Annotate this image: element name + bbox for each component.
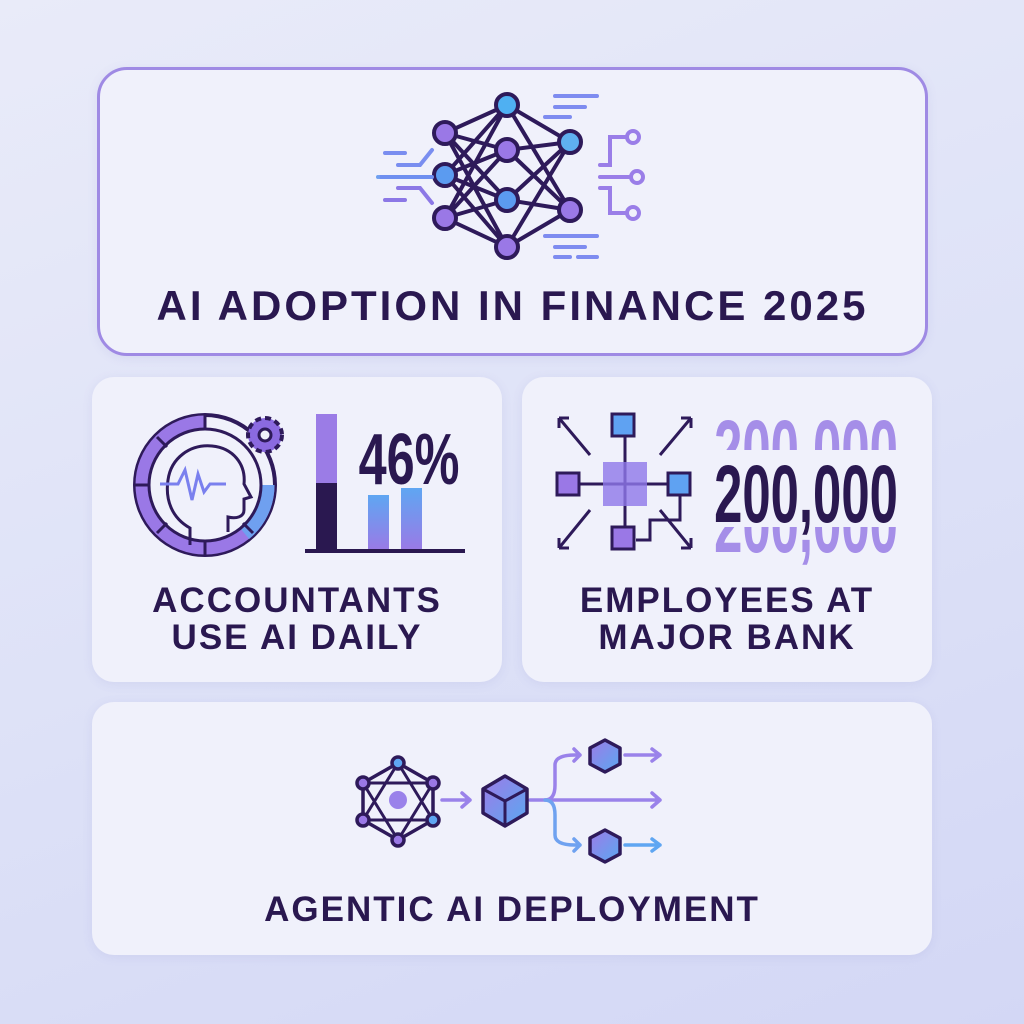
panel: employees (522, 377, 932, 682)
panel: agentic (92, 702, 932, 955)
stat: 46%: 46% (359, 420, 459, 500)
text: employees (580, 581, 874, 657)
text: employees: EMPLOYEES AT (580, 581, 874, 620)
icon: head ring with gear (135, 415, 282, 555)
stat: 200,000: 200,000 (714, 404, 898, 495)
panel: header (97, 67, 928, 356)
stat: 200,000: 200,000 (714, 449, 898, 540)
title: AI ADOPTION IN FINANCE 2025 (157, 282, 868, 329)
text: accountants (152, 581, 442, 657)
stat: 200,000 (716, 420, 896, 565)
text: accountants: ACCOUNTANTS (152, 581, 442, 620)
icon: agentic flow (357, 740, 660, 862)
panel: accountants (92, 377, 502, 682)
text: accountants: USE AI DAILY (172, 618, 422, 657)
icon: network diagram (557, 414, 691, 549)
icon: neural network (376, 94, 643, 258)
text: agentic: AGENTIC AI DEPLOYMENT (264, 890, 760, 929)
chart: bars (305, 414, 465, 553)
stat: 200,000: 200,000 (714, 479, 898, 570)
text: employees: MAJOR BANK (598, 618, 856, 657)
